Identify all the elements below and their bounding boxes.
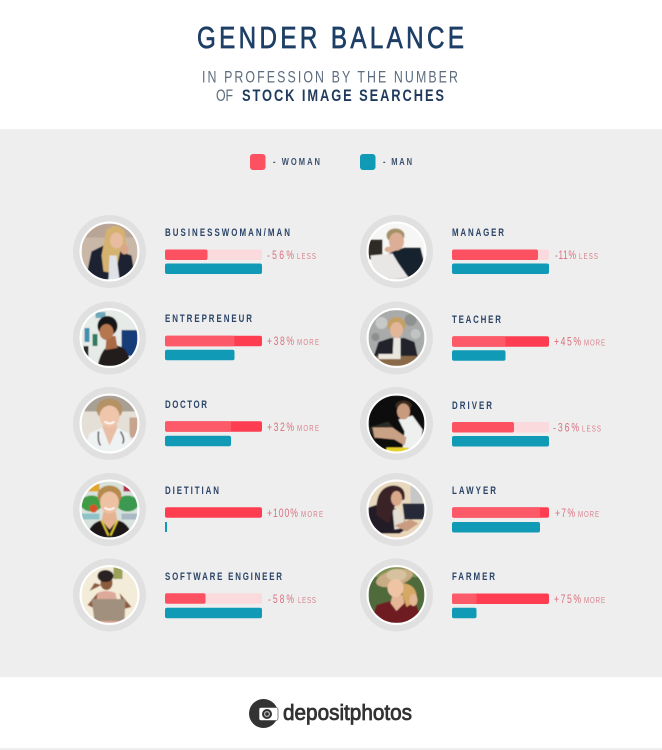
value: MORE [297,423,319,433]
value: MORE [584,337,605,348]
label: DOCTOR [165,399,207,411]
panel: entrepreneur [73,302,319,374]
value: LESS [579,251,598,261]
value [267,422,319,434]
value: +38% [267,336,294,348]
panel: teacher [360,302,605,374]
bar: man [165,608,262,618]
label: MANAGER [452,227,504,239]
value: -58% [268,594,294,606]
label: DRIVER [452,400,492,412]
panel: manager [360,215,598,288]
value [555,508,599,520]
value [554,336,605,349]
panel: dietitian [73,473,323,546]
value: -36% [553,422,579,435]
panel: doctor [73,387,319,460]
panel: grey content background [0,129,662,677]
photo: dietitian [73,473,146,546]
bar: man [165,350,234,360]
bar: woman [165,593,262,604]
bar: woman [452,507,549,518]
value: LESS [582,423,601,434]
photo: businesswoman [73,215,146,288]
label: LAWYER [452,485,496,497]
value [267,250,316,262]
legend: woman: - WOMAN [273,156,320,167]
photo: manager [360,215,433,288]
bar: man [165,436,231,446]
value: LESS [298,595,316,605]
value: +45% [554,336,581,349]
photo: doctor [73,387,146,460]
bar: woman [452,422,549,432]
legend: man: - MAN [383,156,412,167]
header [197,20,464,106]
panel: driver [360,387,601,460]
bar: woman [165,507,262,518]
label: DIETITIAN [165,485,219,497]
panel: businesswoman/man [73,215,316,288]
subtitle line 1: IN PROFESSION BY THE NUMBER [202,69,458,87]
bar: woman [165,336,262,346]
value [268,594,316,606]
photo: teacher [360,302,433,374]
subtitle line 2: OF [216,87,233,106]
value: -11% [555,250,576,262]
photo: driver [360,387,433,460]
logo: depositphotos [249,699,412,728]
icon: camera [249,699,278,728]
bar: man [165,522,167,532]
value [267,336,319,348]
photo: lawyer [360,473,433,546]
value: MORE [297,337,319,347]
value: MORE [301,509,323,519]
bar: man [165,264,262,274]
label: BUSINESSWOMAN/MAN [165,227,290,239]
value: +7% [555,508,575,520]
label: TEACHER [452,314,501,326]
wordmark: depositphotos [283,700,412,725]
bar: man [452,522,540,532]
value: +32% [267,422,294,434]
bar: man [452,608,476,618]
value [267,508,323,520]
bar: woman [452,594,549,604]
bar: woman [452,336,549,347]
title: GENDER BALANCE [197,20,464,55]
value [555,250,598,262]
value: +75% [554,594,581,606]
value: LESS [297,251,316,261]
value: MORE [584,595,605,605]
photo: software engineer [73,558,146,632]
photo: entrepreneur [73,302,146,374]
label: SOFTWARE ENGINEER [165,571,282,583]
legend [250,154,412,170]
value [554,594,605,606]
label: ENTREPRENEUR [165,313,252,325]
bar: woman [165,421,262,432]
subtitle line 2: STOCK IMAGE SEARCHES [242,88,444,105]
value: -56% [267,250,294,262]
bar: woman [165,250,262,260]
legend: man [360,154,412,170]
bar: man [452,350,506,361]
legend: woman [250,154,320,170]
value: MORE [578,509,599,519]
value: +100% [267,508,298,520]
label: FARMER [452,571,495,583]
bar: man [452,264,549,274]
panel: software engineer [73,558,316,632]
photo: farmer [360,558,433,632]
panel: lawyer [360,473,599,546]
bar: man [452,436,549,446]
value [553,422,601,435]
panel: farmer [360,558,605,632]
bar: woman [452,250,549,260]
